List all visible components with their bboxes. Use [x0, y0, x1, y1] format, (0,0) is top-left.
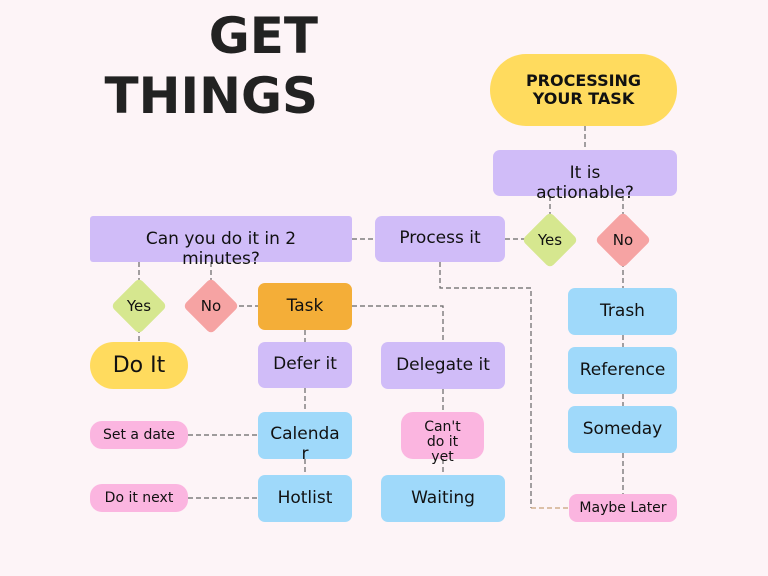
someday: Someday — [583, 419, 662, 439]
title — [104, 7, 318, 125]
task: Task — [287, 296, 323, 316]
process it — [375, 216, 505, 262]
maybe later: Maybe Later — [579, 500, 667, 516]
waiting — [381, 475, 505, 522]
set a date — [90, 421, 188, 449]
can you do it: minutes? — [182, 249, 260, 269]
can't do it yet — [401, 412, 484, 459]
can't do it yet: Can't — [424, 419, 461, 435]
maybe later — [569, 494, 677, 522]
hotlist — [258, 475, 352, 522]
delegate it: Delegate it — [396, 355, 490, 375]
it is actionable: actionable? — [536, 183, 634, 203]
calendar: r — [301, 444, 308, 464]
reference — [568, 347, 677, 394]
trash: Trash — [600, 301, 645, 321]
text: Yes — [127, 297, 151, 315]
trash — [568, 288, 677, 335]
processing your task: YOUR TASK — [533, 89, 634, 108]
calendar: Calenda — [270, 424, 340, 444]
can't do it yet: yet — [431, 449, 454, 465]
defer it: Defer it — [273, 354, 337, 374]
do it next: Do it next — [105, 490, 173, 506]
can you do it — [90, 216, 352, 262]
processing your task — [490, 54, 677, 126]
can't do it yet: do it — [427, 434, 458, 450]
it is actionable — [493, 150, 677, 196]
set a date: Set a date — [103, 427, 175, 443]
delegate it — [381, 342, 505, 389]
someday — [568, 406, 677, 453]
hotlist: Hotlist — [278, 488, 332, 508]
calendar — [258, 412, 352, 459]
no diamond 2 — [184, 280, 238, 332]
text: Yes — [538, 231, 562, 249]
text: No — [613, 231, 633, 249]
it is actionable: It is — [570, 163, 600, 183]
reference: Reference — [580, 360, 665, 380]
task — [258, 283, 352, 330]
process it: Process it — [399, 228, 481, 248]
do it — [90, 342, 188, 389]
processing your task: PROCESSING — [526, 71, 641, 90]
no diamond — [596, 214, 650, 266]
waiting: Waiting — [411, 488, 475, 508]
title: GET — [209, 7, 318, 65]
can you do it: Can you do it in 2 — [146, 229, 296, 249]
yes diamond 2 — [112, 280, 166, 332]
defer it — [258, 342, 352, 388]
do it: Do It — [113, 353, 165, 378]
title: THINGS — [105, 67, 318, 125]
text: No — [201, 297, 221, 315]
do it next — [90, 484, 188, 512]
yes diamond — [524, 214, 576, 266]
